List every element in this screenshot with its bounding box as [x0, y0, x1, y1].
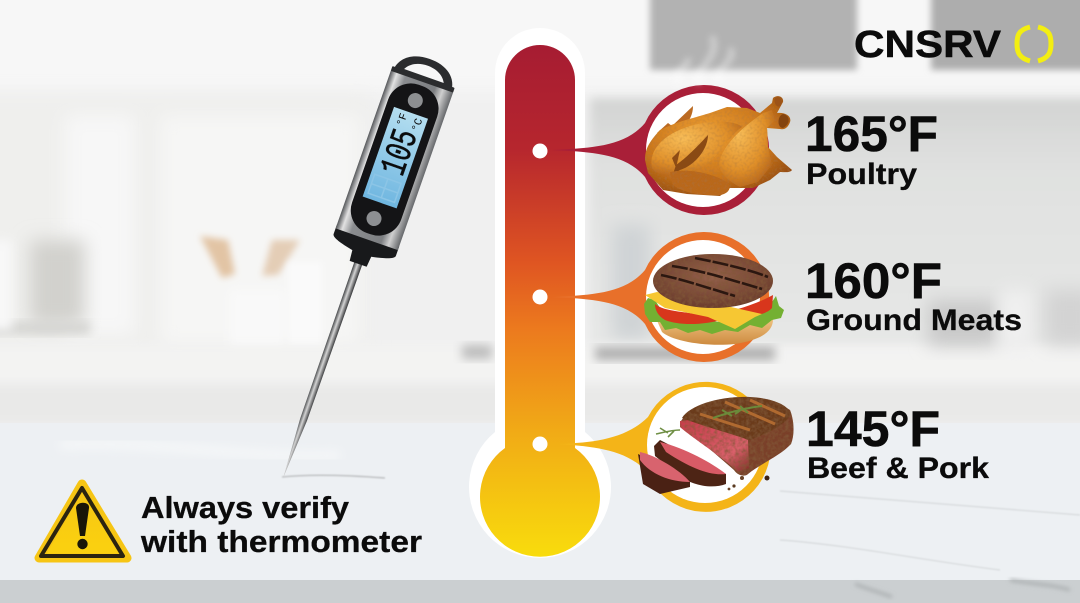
165°F: 165°F: [805, 106, 938, 162]
Beef & Pork: Beef & Pork: [807, 452, 989, 485]
handle collar: [327, 225, 399, 275]
160°F: 160°F: [805, 253, 942, 309]
lcd units: [395, 111, 426, 134]
poultry callout: [552, 36, 792, 215]
lcd units: °F: [395, 112, 411, 128]
temperature label: poultry: [805, 106, 938, 191]
logo ring: [1017, 27, 1051, 61]
icon: steak: [638, 397, 794, 494]
icon: warning triangle: [39, 484, 127, 558]
ground meats callout ring and pointer: [552, 232, 769, 362]
gauge white outline: [469, 28, 611, 558]
hanging loop: [390, 49, 459, 99]
marker dot 145: [532, 436, 548, 452]
poultry callout ring and pointer: [552, 85, 769, 215]
top button: [406, 91, 425, 110]
lcd screen: [363, 107, 428, 208]
ground meats callout: [552, 232, 784, 362]
thermometer gauge: [469, 28, 611, 558]
marker dot 165: [532, 144, 548, 158]
probe: [279, 257, 364, 479]
logo: [854, 24, 1051, 66]
warning note: [39, 484, 422, 559]
lcd ghost segments: [368, 174, 401, 202]
Ground Meats: Ground Meats: [806, 304, 1022, 337]
gauge coloured fill: [480, 45, 600, 557]
temperature label: beef and pork: [806, 401, 989, 485]
steam: [677, 36, 732, 84]
lcd reading: 105: [374, 124, 429, 181]
warning note: with thermometer: [140, 524, 422, 559]
beef and pork callout ring and pointer: [556, 382, 771, 512]
145°F: 145°F: [806, 401, 940, 457]
icon: roast chicken: [645, 96, 792, 196]
lcd units: °C: [410, 117, 426, 134]
warning text: Always verify: [141, 490, 350, 525]
icon: burger: [644, 254, 784, 345]
digital thermometer: [252, 48, 461, 489]
beef and pork callout: [556, 382, 794, 512]
Poultry: Poultry: [806, 158, 917, 191]
black face: [344, 77, 445, 242]
bottom button: [364, 209, 384, 228]
steel body: [336, 70, 453, 250]
marker dot 160: [532, 290, 548, 304]
logo wordmark: CNSRV: [854, 24, 1002, 66]
probe shadow on counter: [282, 475, 385, 478]
temperature label: ground meats: [805, 253, 1022, 337]
